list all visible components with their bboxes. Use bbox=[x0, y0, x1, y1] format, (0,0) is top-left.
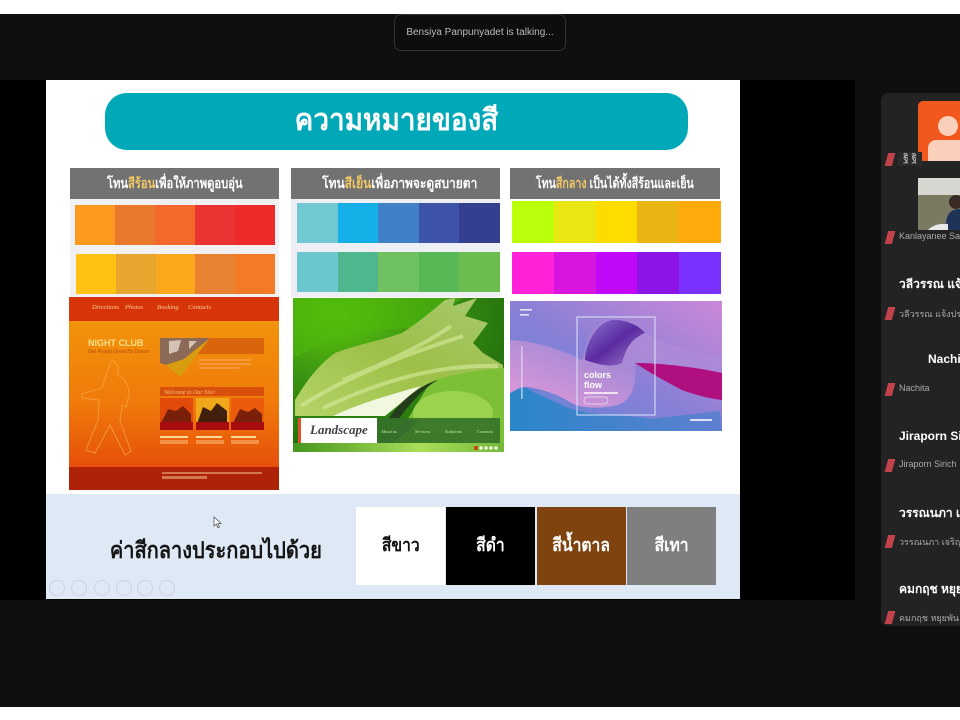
participant tile: photo bbox=[918, 178, 960, 230]
swatch: brown bbox=[537, 507, 626, 585]
participant label: 7: คมกฤช หยุยพัน bbox=[899, 613, 959, 623]
image: landscape leaf website: About us bbox=[380, 429, 397, 434]
image: landscape leaf website: Services bbox=[415, 429, 430, 434]
talking indicator: Bensiya Panpunyadet is talking... bbox=[406, 27, 554, 38]
image: night club website bbox=[69, 297, 279, 490]
heading: warm tones: โทนสีร้อนเพื่อให้ภาพดูอบอุ่น bbox=[107, 175, 242, 191]
participant label: 3: วลีวรรณ แจ้งปร bbox=[899, 309, 960, 319]
neutral colors label: ค่าสีกลางประกอบไปด้วย bbox=[110, 537, 322, 563]
slide bbox=[46, 80, 740, 599]
swatch: gray bbox=[627, 507, 716, 585]
image: night club website: Get Ready Great By Dance bbox=[88, 349, 149, 355]
talking indicator bbox=[394, 14, 566, 51]
image: colors flow poster bbox=[510, 301, 722, 431]
swatch: white bbox=[356, 507, 445, 585]
heading: warm tones bbox=[70, 168, 279, 199]
mic muted icon 2 bbox=[885, 231, 895, 244]
shared screen black area bbox=[0, 80, 855, 600]
image: night club website: Booking bbox=[157, 304, 179, 311]
participant tile: orange avatar bbox=[918, 101, 960, 161]
slide footer band bbox=[46, 494, 740, 599]
mic muted icon 3 bbox=[885, 307, 895, 320]
mic muted icon 7 bbox=[885, 611, 895, 624]
swatch: black: สีดำ bbox=[476, 535, 505, 555]
participant label: 1 bbox=[898, 152, 922, 166]
title banner bbox=[105, 93, 688, 150]
heading: cool tones bbox=[291, 168, 500, 199]
mouse pointer icon bbox=[214, 516, 222, 528]
mic muted icon 5 bbox=[885, 459, 895, 472]
palette: neutral row 1 bbox=[512, 201, 721, 243]
swatch: brown: สีน้ำตาล bbox=[553, 535, 610, 555]
palette: cool row 2 bbox=[297, 252, 500, 292]
image: night club website: Directions bbox=[91, 304, 120, 311]
image: landscape leaf website bbox=[293, 298, 504, 452]
image: landscape leaf website: Contacts bbox=[477, 429, 493, 434]
image: landscape leaf website: Solutions bbox=[445, 429, 462, 434]
image: colors flow poster: flow bbox=[584, 380, 603, 390]
palette: neutral row 2 bbox=[512, 252, 721, 294]
participant label: 1: ฐิ ฐิ bbox=[903, 153, 917, 164]
heading: cool tones: โทนสีเย็นเพื่อภาพจะดูสบายตา bbox=[322, 175, 478, 191]
image: landscape leaf website: Landscape bbox=[309, 422, 368, 437]
slideshow controls bbox=[49, 580, 175, 596]
palette: warm row 2 bbox=[76, 254, 275, 294]
swatch: white: สีขาว bbox=[382, 535, 419, 555]
palette: cool row 1 bbox=[297, 203, 500, 243]
participant label: 2: Kanlayanee Sa bbox=[899, 231, 960, 241]
swatch backdrop: cool bbox=[291, 199, 500, 297]
avatar head bbox=[938, 116, 958, 136]
participants panel bbox=[881, 93, 960, 626]
title banner: ความหมายของสี bbox=[295, 104, 498, 137]
image: night club website: Contacts bbox=[188, 304, 212, 311]
palette: warm row 1 bbox=[75, 205, 275, 245]
avatar body bbox=[928, 140, 960, 164]
swatch: black bbox=[446, 507, 535, 585]
participant label: 4: Nachita bbox=[899, 383, 930, 393]
image: night club website: NIGHT CLUB bbox=[88, 338, 144, 348]
image: colors flow poster: colors bbox=[584, 370, 611, 380]
participant label: 5: Jiraporn Sirich bbox=[899, 459, 957, 469]
heading: neutral tones: โทนสีกลาง เป็นได้ทั้งสีร้อนและเย็น bbox=[536, 175, 694, 191]
image: night club website: Welcome to Our Site! bbox=[164, 390, 215, 396]
image: night club website: Photos bbox=[124, 304, 144, 311]
heading: neutral tones bbox=[510, 168, 720, 199]
swatch backdrop: warm bbox=[70, 199, 279, 297]
mic muted icon 6 bbox=[885, 535, 895, 548]
mic muted icon 1 bbox=[885, 153, 895, 166]
mic muted icon 4 bbox=[885, 383, 895, 396]
swatch: gray: สีเทา bbox=[654, 535, 689, 555]
